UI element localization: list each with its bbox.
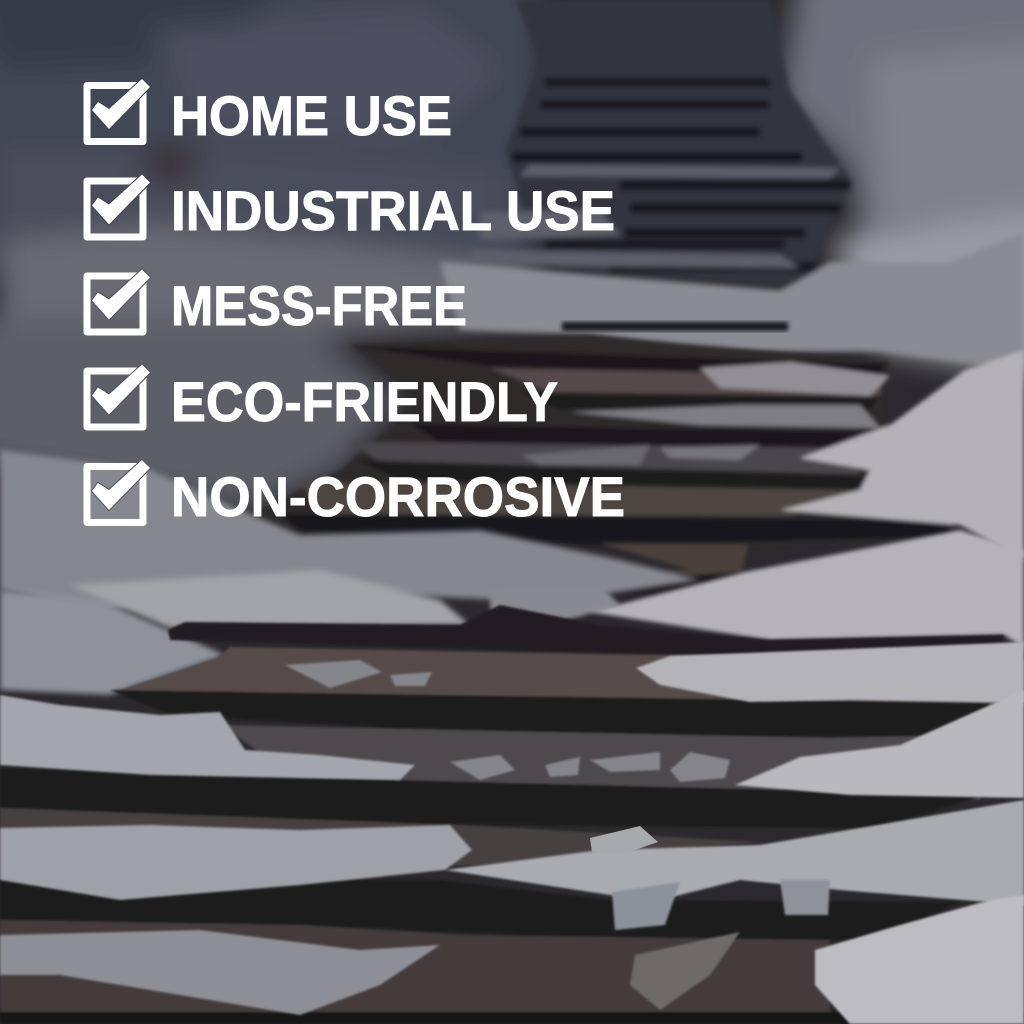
item: home use <box>87 79 452 147</box>
icon: checkbox <box>87 174 150 237</box>
upper walkway slats <box>470 0 850 285</box>
small ice chips <box>285 660 730 782</box>
lower planks <box>0 605 1024 1024</box>
item: mess-free <box>87 270 467 337</box>
icon: checkbox <box>87 79 150 142</box>
right snow over plank <box>590 530 1024 648</box>
item: eco-friendly <box>87 364 558 433</box>
middle planks <box>250 335 1024 594</box>
icon: checkbox <box>87 460 150 522</box>
lower-left snow mound <box>0 450 700 610</box>
feature list <box>87 79 625 528</box>
top snow, left side <box>0 0 560 510</box>
label: INDUSTRIAL USE <box>171 179 615 242</box>
item: non-corrosive <box>87 460 625 528</box>
item: industrial use <box>87 174 615 242</box>
icon: checkbox <box>87 364 150 427</box>
snow band across the walkway <box>440 232 1024 370</box>
top snow, right side <box>780 0 1024 380</box>
label: HOME USE <box>171 84 452 147</box>
left ice sheets <box>0 695 415 780</box>
right lower snow <box>636 642 1024 703</box>
label: ECO-FRIENDLY <box>171 370 558 433</box>
label: MESS-FREE <box>171 274 467 337</box>
label: NON-CORROSIVE <box>171 465 625 528</box>
icon: checkbox <box>87 270 150 332</box>
